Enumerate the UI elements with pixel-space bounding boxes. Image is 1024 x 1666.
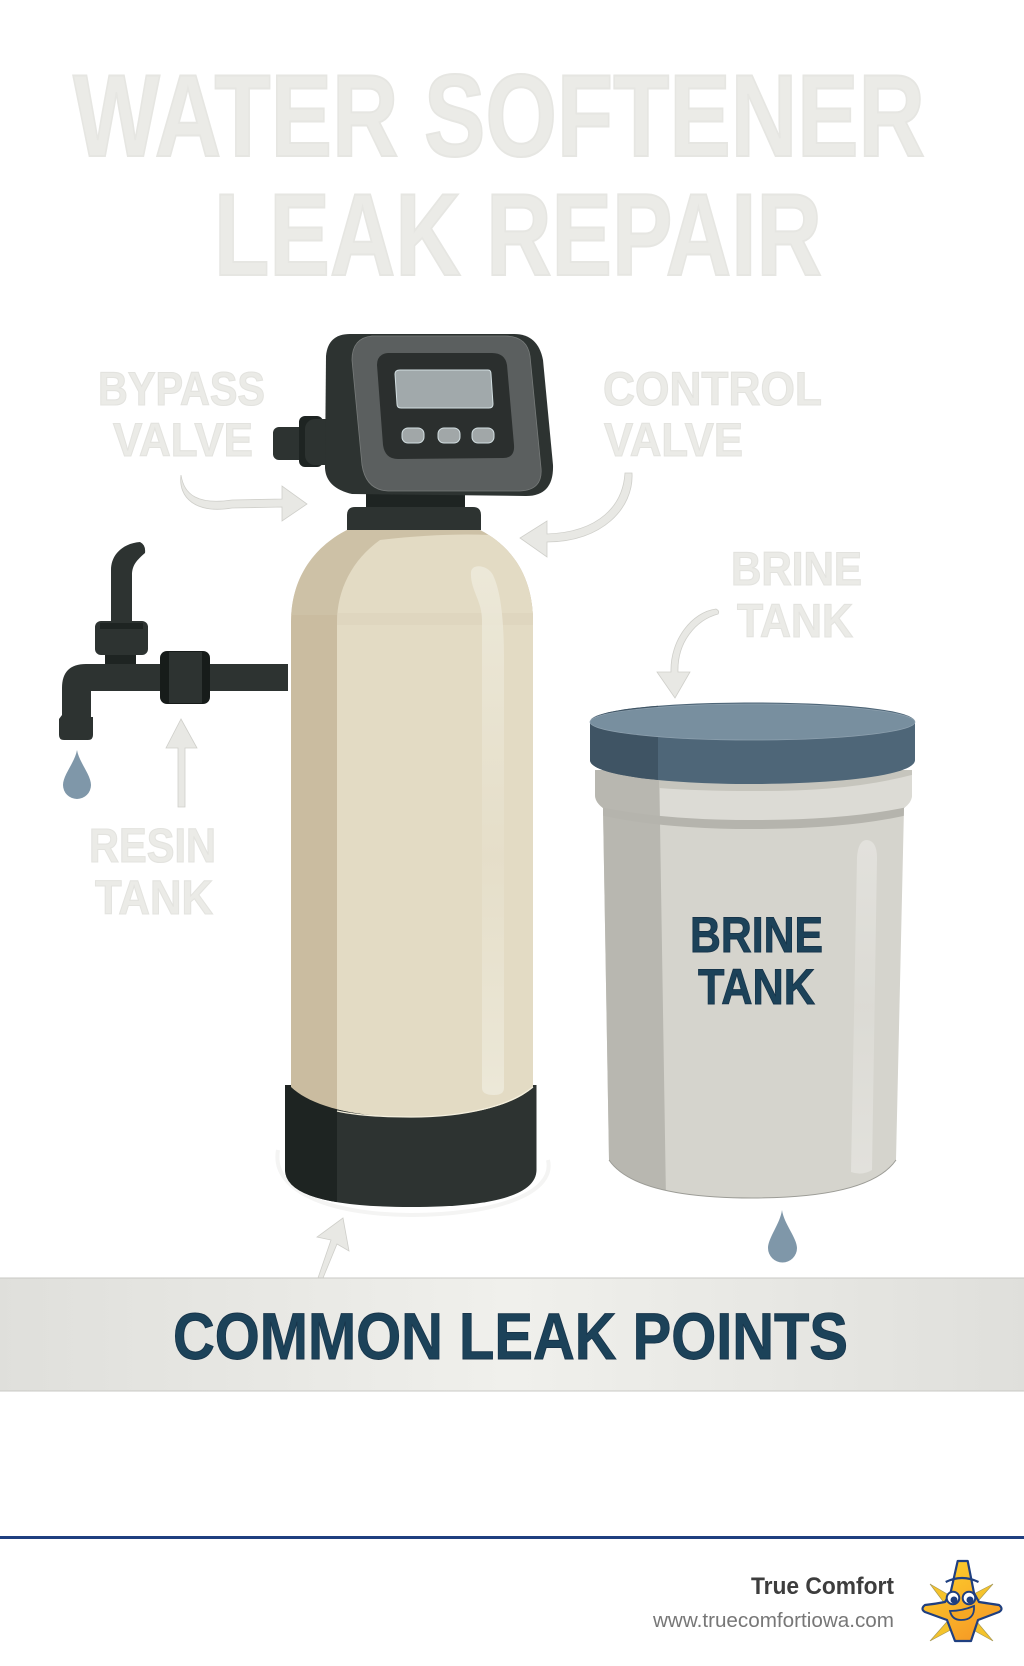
arrow: base leak — [317, 1218, 349, 1278]
brine tank highlight — [851, 840, 877, 1174]
smile — [950, 1606, 974, 1620]
faucet spout and pipe — [59, 664, 288, 740]
label: control valve: VALVE — [604, 413, 743, 466]
valve display panel — [377, 353, 514, 459]
faucet nut — [95, 621, 148, 655]
label: control valve — [603, 362, 822, 466]
faucet neck — [105, 655, 136, 665]
pipe connector — [160, 651, 210, 704]
star body — [922, 1561, 1002, 1641]
valve faceplate — [352, 336, 541, 491]
brine tank label: TANK — [698, 959, 815, 1015]
footer rule — [0, 1536, 1024, 1539]
arrow: brine tank — [657, 609, 719, 698]
arrow: control valve — [520, 473, 632, 557]
banner: common leak points — [0, 1278, 1024, 1391]
label: bypass valve: BYPASS — [98, 362, 265, 415]
hat brim — [946, 1578, 978, 1582]
faucet — [59, 542, 288, 740]
arrow: bypass valve — [181, 475, 307, 521]
faucet stem — [111, 542, 145, 622]
footer brand name: True Comfort — [751, 1573, 894, 1600]
tank body — [285, 525, 540, 1130]
title — [73, 50, 925, 300]
valve screen — [395, 370, 493, 408]
label: brine tank top — [731, 542, 862, 647]
footer website: www.truecomfortiowa.com — [652, 1610, 894, 1632]
eyes — [947, 1592, 975, 1604]
valve neck — [366, 490, 465, 510]
star back points — [930, 1584, 993, 1641]
brine tank bottom edge — [609, 1160, 896, 1198]
label: bypass valve — [98, 362, 265, 466]
title: LEAK REPAIR — [214, 169, 822, 300]
valve housing — [325, 334, 553, 496]
label: brine tank top: BRINE — [731, 542, 862, 595]
brine tank body — [590, 760, 920, 1205]
puddle outline — [277, 1150, 549, 1215]
tank bottom edge — [337, 1087, 533, 1117]
logo: star mascot — [922, 1561, 1002, 1641]
label: resin tank — [89, 820, 216, 925]
label: bypass valve: VALVE — [113, 413, 253, 466]
bypass knob — [273, 416, 343, 467]
valve buttons — [402, 428, 494, 443]
brine tank label: BRINE — [690, 907, 823, 963]
drop: faucet leak — [63, 750, 91, 799]
drop: brine tank leak — [768, 1210, 797, 1262]
banner text: COMMON LEAK POINTS — [173, 1299, 848, 1373]
label: resin tank: TANK — [95, 872, 213, 925]
arrow: resin tank — [166, 719, 197, 807]
tank base — [285, 1085, 537, 1210]
tank highlight — [471, 566, 504, 1095]
label: resin tank: RESIN — [89, 820, 216, 873]
valve collar — [347, 507, 481, 530]
control valve head — [273, 334, 553, 530]
water softener resin tank — [285, 525, 540, 1210]
label: brine tank top: TANK — [737, 594, 853, 647]
brine tank label — [690, 907, 823, 1015]
brine tank — [590, 700, 920, 1205]
brine tank lid — [590, 700, 915, 790]
label: control valve: CONTROL — [603, 362, 822, 415]
